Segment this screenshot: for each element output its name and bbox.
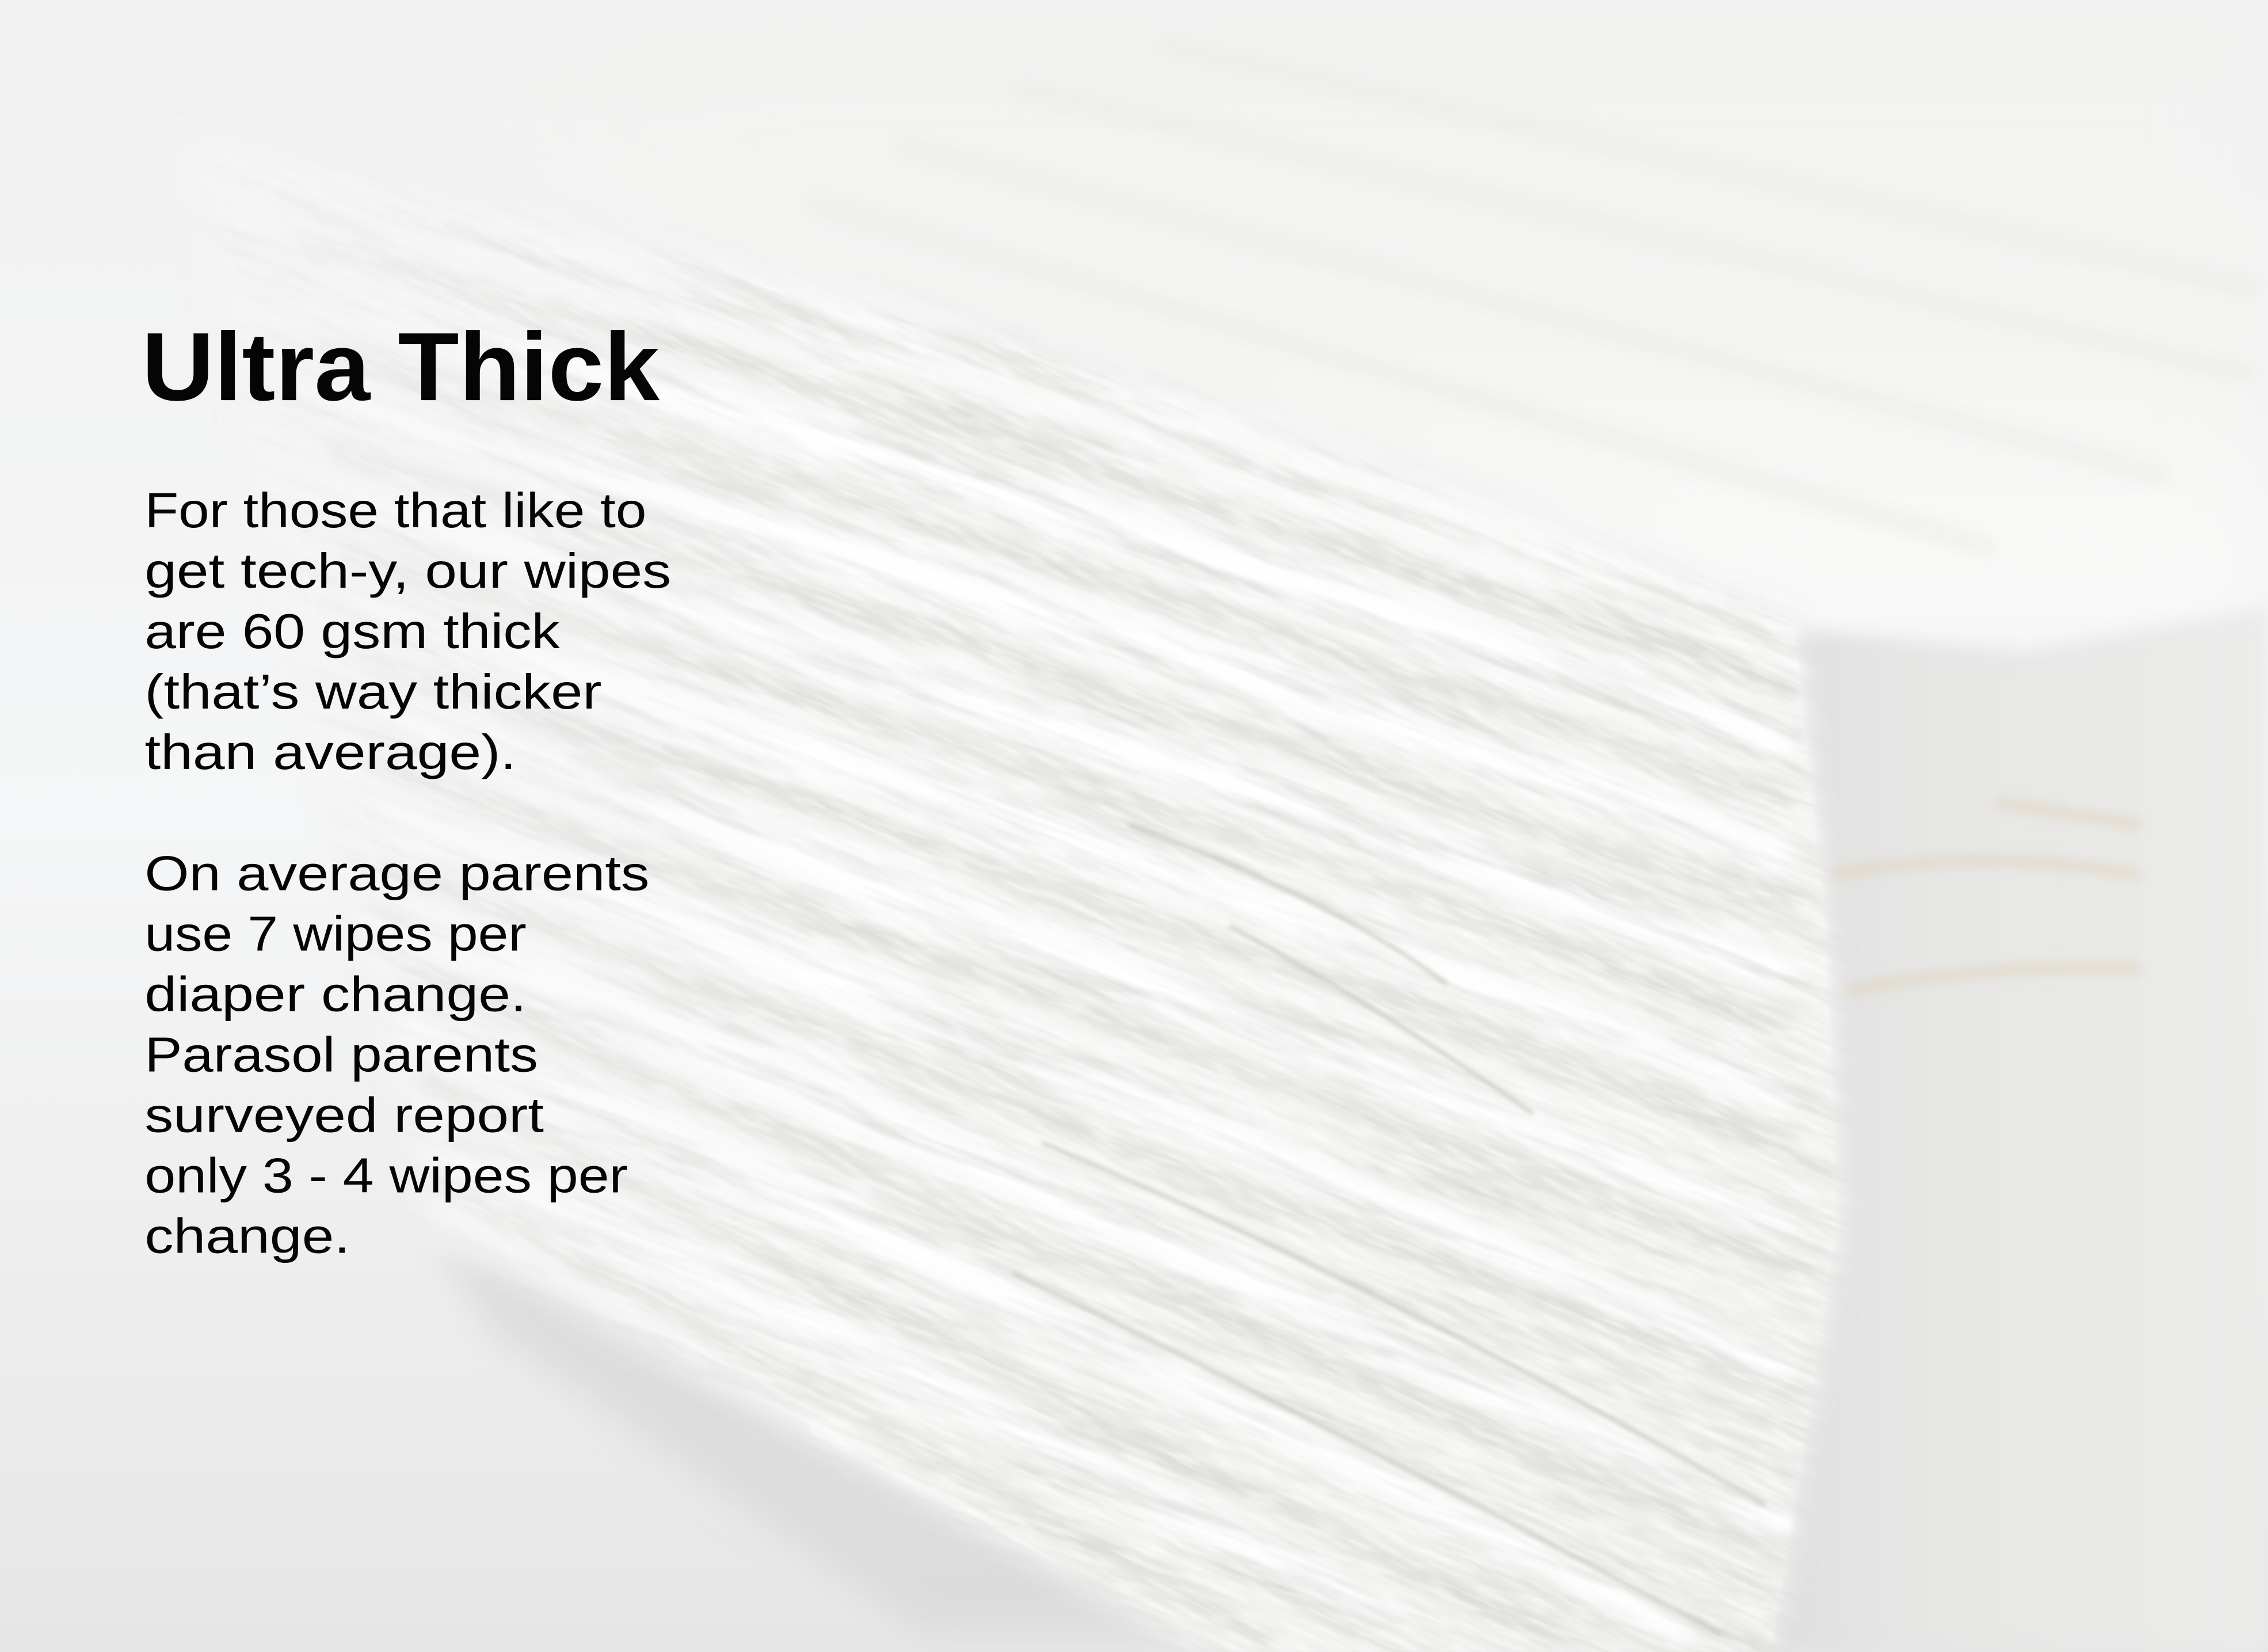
fuzzy fibre highlights: [283, 214, 2031, 1522]
text block: wipes per change: change.: [144, 1209, 350, 1264]
text block: thickness description: [144, 484, 671, 780]
text block: thickness description: For those that like to: [144, 484, 646, 538]
darker shaded layer bands: [296, 240, 1794, 1640]
top surface of the wipe stack: [188, 14, 2256, 622]
text block: thickness description: than average).: [144, 725, 516, 780]
title: Ultra Thick: [142, 313, 660, 421]
front face of the wipe stack: [345, 241, 1839, 1652]
top surface fabric ridges: [810, 43, 2256, 550]
table shadow beneath the stack: [434, 1244, 1215, 1635]
side face of the wipe stack: [1772, 608, 2268, 1652]
text block: wipes per change: surveyed report: [144, 1088, 544, 1143]
text block: wipes per change: On average parents: [144, 846, 650, 901]
woven fabric texture: [285, 245, 2029, 1491]
thin dark gaps between sheets: [1012, 824, 1764, 1635]
text block: wipes per change: [144, 846, 650, 1264]
text block: thickness description: get tech-y, our wipes: [144, 544, 671, 599]
text block: wipes per change: diaper change.: [144, 967, 527, 1022]
text block: wipes per change: Parasol parents: [144, 1027, 538, 1082]
text block: thickness description: (that’s way thicker: [144, 665, 602, 720]
bright fluffy layer bands: [304, 292, 1794, 1635]
side face pale stains: [1829, 803, 2141, 991]
blurred left fade of the stack: [144, 116, 839, 1652]
text block: thickness description: are 60 gsm thick: [144, 604, 560, 659]
text block: wipes per change: use 7 wipes per: [144, 907, 527, 961]
text block: wipes per change: only 3 - 4 wipes per: [144, 1149, 628, 1204]
